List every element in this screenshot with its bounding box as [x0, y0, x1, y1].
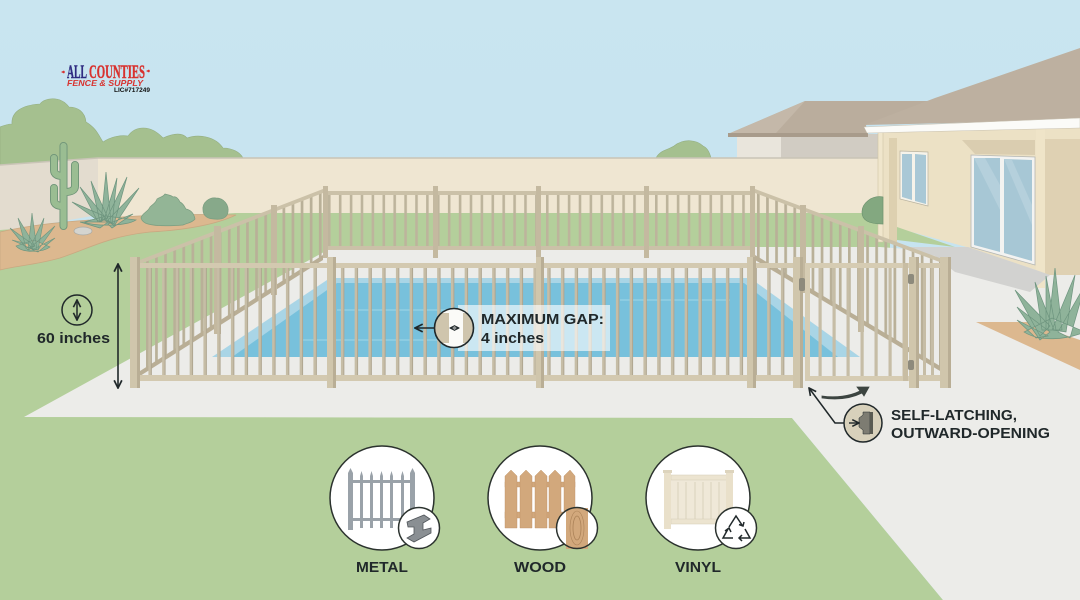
gap pointer arrow	[415, 327, 434, 329]
logo: LIC#717249	[114, 87, 150, 94]
wood label: WOOD	[514, 560, 566, 576]
mulch bed left	[0, 215, 236, 270]
latch icon	[844, 404, 882, 442]
mulch bed right	[976, 322, 1080, 370]
back neighbour house	[728, 101, 932, 159]
gap magnifier icon	[434, 308, 474, 348]
height dimension arrow	[117, 264, 119, 388]
swimming pool	[212, 278, 860, 357]
large agave plant	[1015, 268, 1080, 340]
wood grain badge	[556, 508, 598, 549]
gap callout	[415, 305, 610, 351]
logo	[61, 62, 150, 94]
cactus	[54, 146, 75, 226]
latch label: OUTWARD-OPENING	[891, 426, 1050, 442]
background hills	[0, 99, 711, 170]
logo: FENCE & SUPPLY	[67, 78, 144, 88]
wood circle	[488, 446, 592, 550]
left side fence	[140, 189, 323, 376]
back fence	[323, 186, 755, 258]
main house	[864, 48, 1080, 288]
height icon	[62, 295, 92, 325]
gate swing arrow	[822, 387, 869, 399]
material: metal	[330, 446, 440, 576]
lawn	[0, 213, 943, 600]
logo: COUNTIES	[89, 62, 145, 83]
vinyl label: VINYL	[675, 560, 721, 576]
sliding door	[971, 155, 1035, 265]
recycle badge	[716, 508, 756, 548]
agave plant left	[72, 172, 139, 228]
latch label	[891, 408, 1050, 442]
metal fence	[348, 468, 415, 530]
right side fence	[755, 189, 945, 374]
gate	[799, 263, 914, 381]
material: wood	[488, 446, 598, 576]
latch pointer arrow	[809, 388, 844, 423]
driveway	[900, 247, 1050, 292]
height label: 60 inches	[37, 330, 110, 347]
window	[900, 151, 928, 206]
concrete pool deck	[24, 247, 1080, 600]
roof	[864, 48, 1080, 125]
steel beam badge	[398, 508, 440, 548]
vinyl fence	[663, 470, 734, 529]
wood fence	[505, 470, 575, 528]
material: vinyl	[646, 446, 756, 576]
shrubs	[141, 194, 228, 226]
gap callout: 4 inches	[481, 330, 544, 347]
perimeter wall	[0, 158, 888, 232]
shrub beside house	[862, 197, 883, 224]
logo: ALL	[67, 62, 87, 83]
vinyl circle	[646, 446, 750, 550]
latch label: SELF-LATCHING,	[891, 408, 1017, 424]
gap text: MAXIMUM GAP:	[481, 311, 604, 328]
metal circle	[330, 446, 434, 550]
rock	[74, 227, 92, 235]
callout panel	[458, 305, 610, 351]
small agave plant	[10, 213, 55, 252]
metal label: METAL	[356, 560, 408, 576]
front fence	[130, 257, 951, 388]
